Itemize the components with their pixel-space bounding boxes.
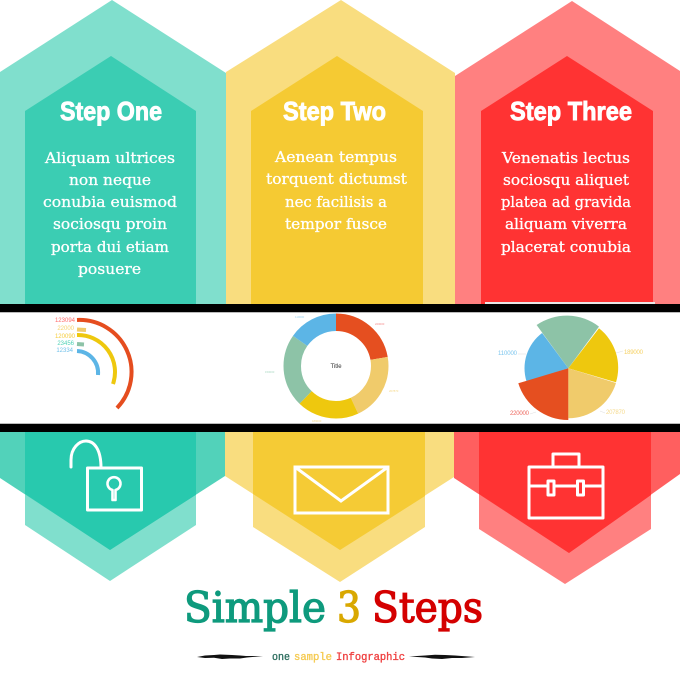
brush stroke left bbox=[197, 654, 263, 659]
chart legend labels: 23456 bbox=[57, 341, 75, 347]
brush stroke right bbox=[409, 655, 475, 659]
heading: step three: Step Three bbox=[510, 96, 632, 126]
text: step three body: platea ad gravida bbox=[501, 193, 631, 211]
text: step one body: conubia euismod bbox=[43, 193, 177, 211]
panel: step one bbox=[0, 0, 226, 304]
subtitle bbox=[272, 652, 405, 664]
pie labels: 207870 bbox=[606, 410, 626, 416]
text: step two body bbox=[266, 148, 407, 233]
text: step three body: sociosqu aliquet bbox=[503, 171, 629, 189]
chart legend labels bbox=[55, 318, 76, 354]
subtitle: Infographic bbox=[336, 652, 405, 664]
text: step three body: Venenatis lectus bbox=[501, 149, 630, 167]
panel: step three bbox=[455, 1, 680, 304]
icon: envelope bbox=[295, 467, 388, 513]
chart: pie bbox=[498, 316, 644, 420]
panel: step one lower hexagon bbox=[0, 432, 225, 581]
text: step one body: non neque bbox=[69, 171, 151, 189]
chart legend labels: 123094 bbox=[55, 318, 76, 324]
donut labels: 220000 bbox=[375, 322, 385, 326]
pie labels: 110000 bbox=[498, 351, 518, 357]
heading: step two: Step Two bbox=[283, 96, 386, 126]
title: Steps bbox=[372, 583, 483, 632]
panel: step two lower hexagon bbox=[225, 432, 454, 582]
panel: step three lower hexagon bbox=[454, 432, 680, 584]
text: step one body bbox=[43, 149, 177, 278]
title: Simple bbox=[184, 583, 326, 632]
text: step three body bbox=[501, 149, 631, 256]
panel: step two bbox=[226, 0, 455, 304]
donut labels: 110000 bbox=[295, 315, 305, 319]
text: step three body: placerat conubia bbox=[501, 238, 631, 256]
pie labels bbox=[498, 350, 644, 417]
text: step one body: sociosqu proin bbox=[53, 215, 167, 233]
subtitle: sample bbox=[294, 652, 332, 664]
donut labels: 189000 bbox=[312, 419, 322, 423]
text: step one body: posuere bbox=[78, 260, 141, 278]
chart legend labels: 120090 bbox=[55, 334, 76, 340]
donut labels bbox=[265, 315, 399, 423]
icon: open padlock bbox=[71, 441, 142, 510]
pie labels: 189000 bbox=[624, 350, 644, 356]
title: 3 bbox=[337, 583, 361, 632]
icon: briefcase bbox=[529, 454, 603, 518]
chart: radial arcs bbox=[55, 318, 132, 408]
chart band bbox=[0, 304, 680, 432]
text: step two body: nec facilisis a bbox=[285, 193, 387, 211]
heading: step one: Step One bbox=[60, 96, 162, 126]
text: step three body: aliquam viverra bbox=[505, 215, 627, 233]
text: step one body: Aliquam ultrices bbox=[44, 149, 175, 167]
donut labels: 150000 bbox=[265, 370, 275, 374]
text: step one body: porta dui etiam bbox=[51, 238, 169, 256]
donut title: Title bbox=[330, 364, 342, 370]
text: step two body: tempor fusce bbox=[285, 215, 387, 233]
subtitle: one bbox=[272, 652, 290, 664]
chart legend labels: 12334 bbox=[56, 348, 74, 354]
chart: donut bbox=[265, 315, 399, 423]
title bbox=[184, 583, 483, 632]
text: step two body: torquent dictumst bbox=[266, 170, 407, 188]
pie labels: 220000 bbox=[510, 411, 530, 417]
chart legend labels: 22000 bbox=[57, 326, 75, 332]
text: step two body: Aenean tempus bbox=[274, 148, 397, 166]
donut labels: 207870 bbox=[389, 389, 399, 393]
